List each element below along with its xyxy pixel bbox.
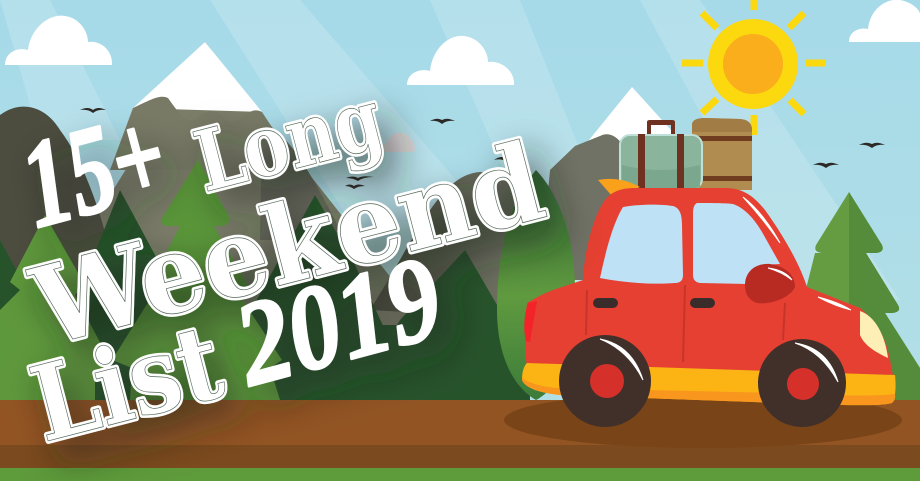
- car: [522, 118, 896, 427]
- rear wheel: [559, 335, 651, 427]
- birds: [80, 108, 885, 189]
- car body: [525, 188, 893, 375]
- mountain: large snowy peak: [20, 42, 440, 340]
- car shadow: [504, 392, 902, 448]
- sun beams: [0, 0, 900, 300]
- tail light: [524, 301, 537, 342]
- tree: pine on right: [770, 192, 920, 400]
- title line: List: List: [19, 300, 234, 466]
- mountain: snowy peak behind car: [500, 87, 780, 280]
- mountain: dark hill left: [0, 107, 120, 300]
- ground: [0, 400, 920, 481]
- title line: 15+: 15+: [8, 85, 180, 255]
- title line: 2019: 2019: [221, 230, 455, 412]
- title: [8, 68, 556, 466]
- front wheel: [758, 339, 846, 427]
- title line: List: List: [19, 300, 234, 466]
- cloud: top right: [849, 0, 920, 42]
- tree: light pine centre: [112, 160, 282, 400]
- sun: [682, 0, 826, 135]
- car door seams: [586, 285, 785, 362]
- roof highlight: [743, 197, 780, 243]
- car windows: [600, 203, 780, 284]
- side mirror: [745, 264, 795, 303]
- headlight: [860, 311, 888, 358]
- bumper: [522, 363, 896, 405]
- title line: Weekend: Weekend: [20, 119, 556, 371]
- luggage: barrel bag: [692, 118, 752, 190]
- forest: dark trees: [0, 190, 530, 402]
- hood highlight: [818, 297, 851, 310]
- cloud: faded behind title: [372, 132, 415, 152]
- title line: Weekend: Weekend: [20, 119, 556, 371]
- tree: light pine left: [0, 215, 112, 400]
- title line: Long: Long: [185, 68, 392, 211]
- cloud: centre: [407, 36, 514, 85]
- title line: Long: Long: [185, 68, 392, 211]
- surfboard: [598, 179, 640, 196]
- luggage: green suitcase: [620, 120, 702, 189]
- cloud: top left: [5, 16, 112, 65]
- tree: rounded tree beside car: [497, 170, 575, 400]
- door handles: [593, 298, 715, 308]
- mountain: dark hill centre: [370, 172, 560, 320]
